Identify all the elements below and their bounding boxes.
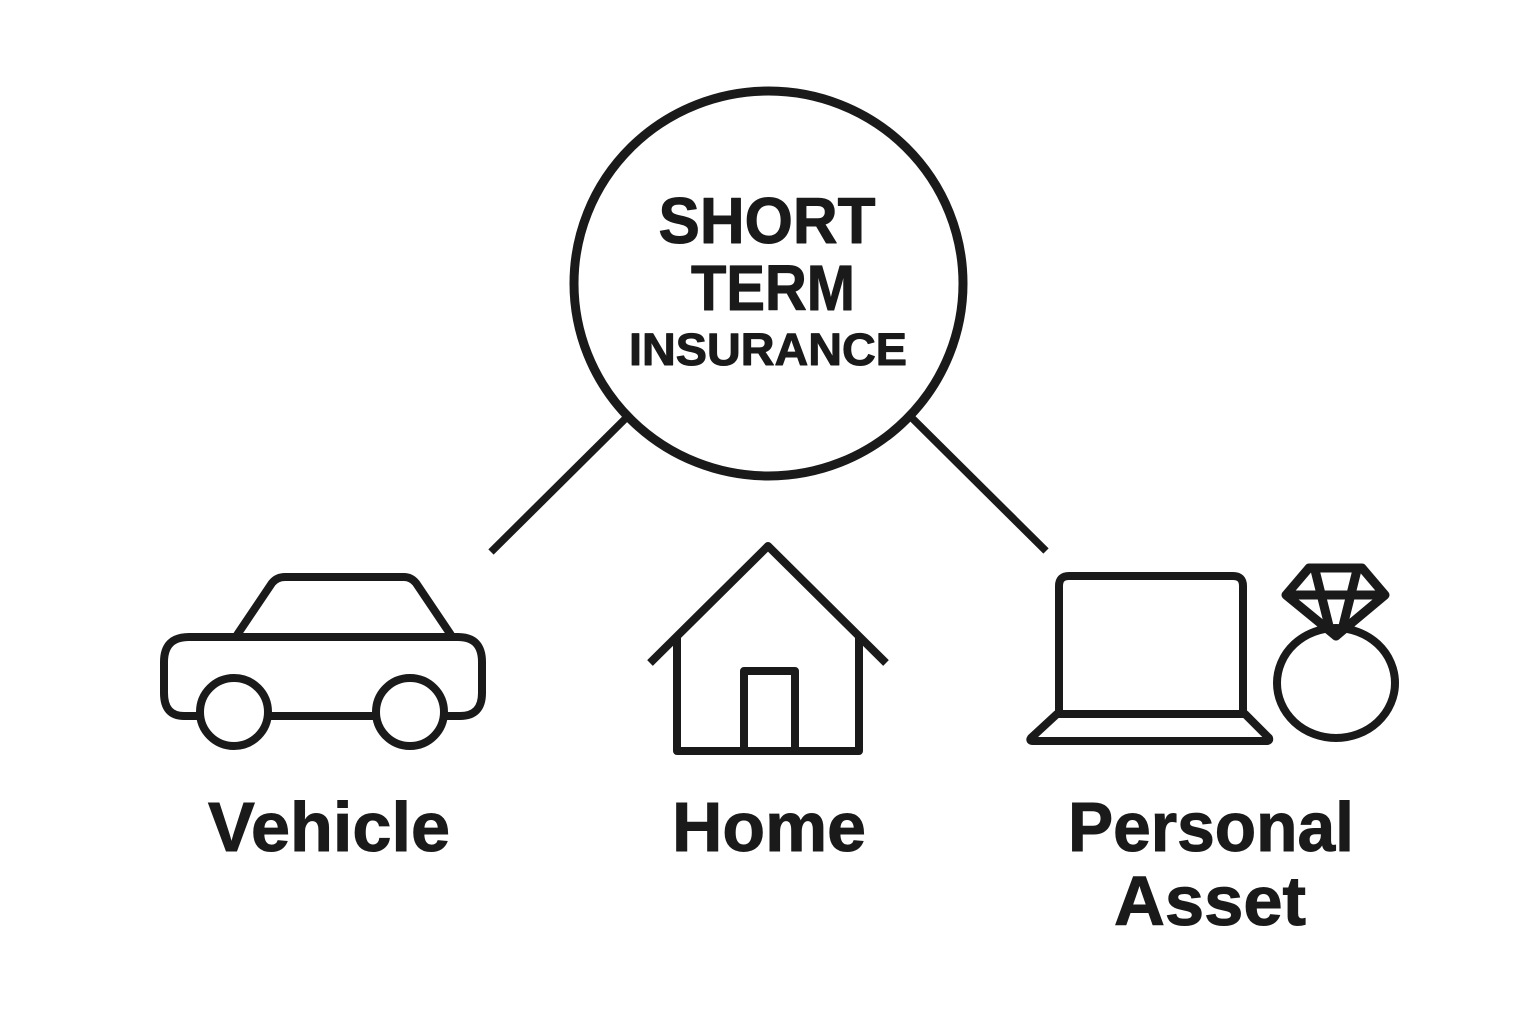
label: personal asset: Asset [1114,862,1306,940]
icon: house [650,546,886,751]
icon: car [164,577,482,746]
label: personal asset [1068,788,1354,940]
connector line: left [491,418,626,552]
title: short term insurance: INSURANCE [629,324,907,375]
connector line: right [912,418,1046,551]
label: home: Home [672,788,866,866]
central circle [574,91,963,476]
icon: diamond ring [1277,568,1395,738]
title: short term insurance: TERM [691,252,855,324]
icon: laptop [1030,576,1269,741]
label: personal asset: Personal [1068,788,1354,866]
label: vehicle: Vehicle [208,788,450,866]
title: short term insurance: SHORT [658,184,876,257]
title: short term insurance [629,184,907,375]
